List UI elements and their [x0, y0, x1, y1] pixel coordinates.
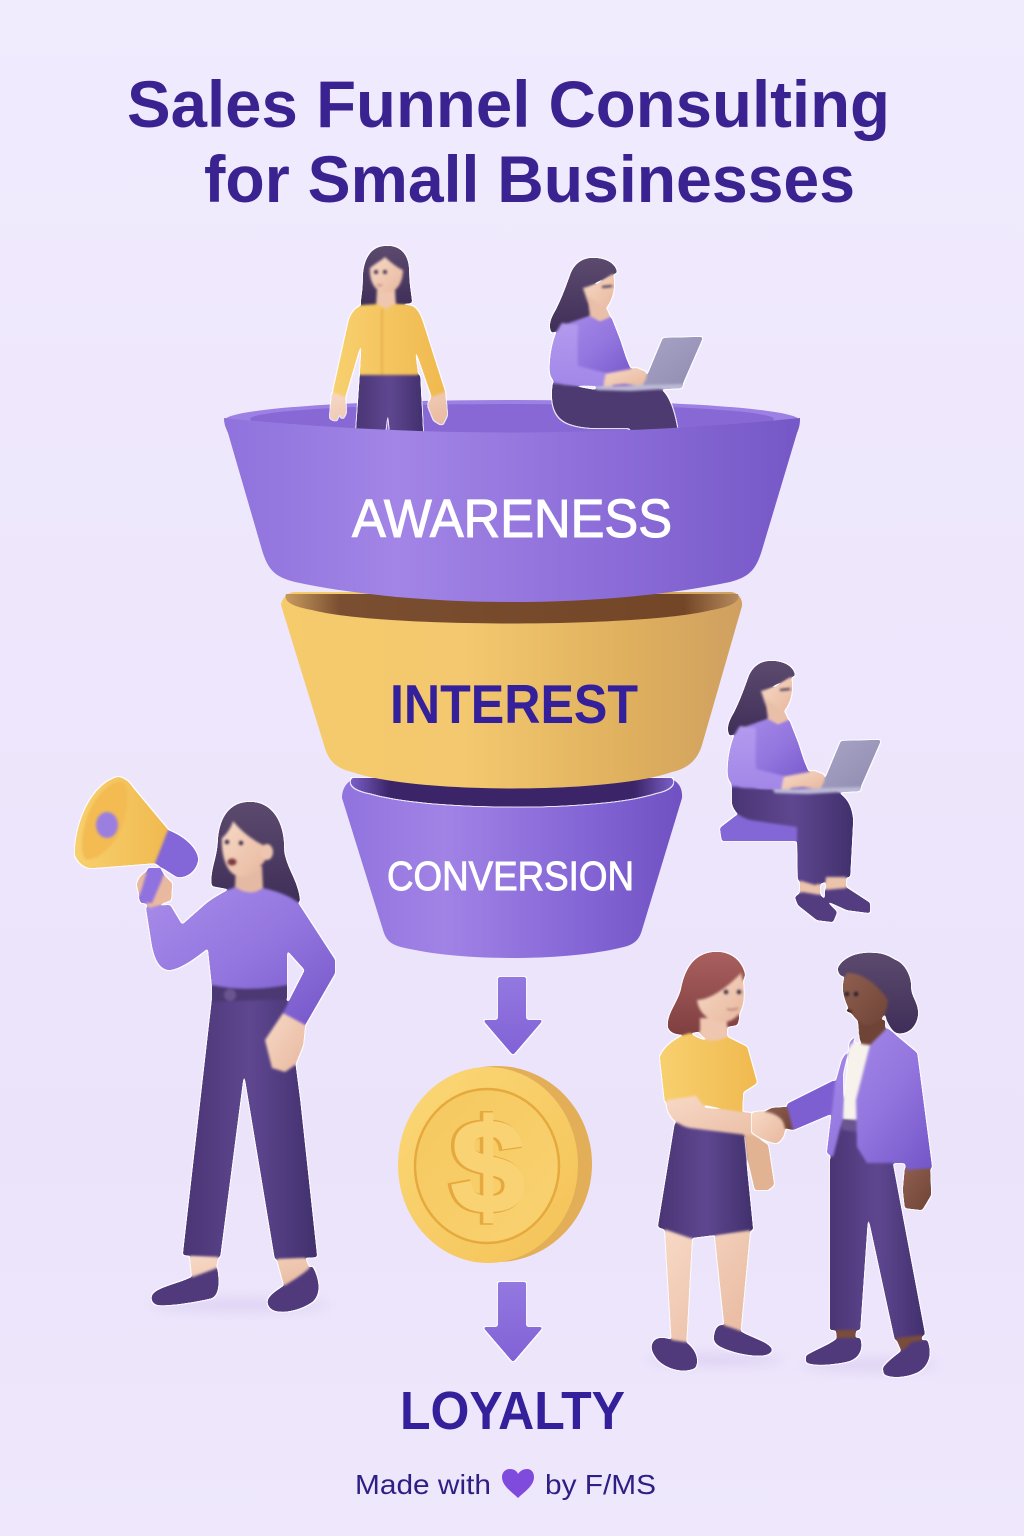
sweater	[146, 887, 335, 1025]
dollar sign shadow: $	[449, 1093, 523, 1240]
coin inner ring	[415, 1089, 559, 1243]
belt	[212, 985, 287, 1002]
ground shadow: blazer woman	[800, 1358, 940, 1372]
socks	[800, 875, 846, 898]
face details	[602, 286, 612, 287]
shoes	[806, 1338, 930, 1377]
coin face	[398, 1067, 578, 1263]
back arm	[745, 1130, 774, 1190]
arrow: coin to loyalty	[483, 1282, 543, 1362]
hair	[838, 953, 918, 1033]
fingers	[158, 875, 171, 900]
megaphone driver	[96, 812, 118, 838]
hair	[212, 802, 300, 902]
belt buckle	[224, 989, 236, 1001]
lowered hand	[265, 1013, 305, 1072]
face details	[374, 270, 387, 286]
funnel: interest	[281, 592, 742, 788]
legs	[732, 783, 853, 885]
funnel: conversion	[342, 778, 682, 958]
shoes	[152, 1266, 318, 1312]
funnel: awareness	[224, 418, 800, 602]
ground shadow: megaphone woman	[150, 1298, 330, 1312]
sweater	[553, 316, 631, 384]
face	[843, 973, 888, 1025]
jacket	[333, 304, 445, 397]
awareness label: AWARENESS	[352, 489, 672, 549]
person: woman with megaphone	[75, 777, 335, 1312]
face details	[225, 840, 243, 866]
person: seated on ledge with laptop	[720, 661, 881, 922]
neck	[376, 290, 396, 312]
shirt	[843, 1043, 870, 1120]
conversion shadow band	[351, 778, 673, 806]
face	[697, 973, 744, 1022]
bell opening	[82, 782, 127, 859]
loyalty label: LOYALTY	[400, 1381, 625, 1441]
title: for Small Businesses	[204, 142, 855, 216]
face	[583, 274, 614, 311]
person: red-haired woman shaking hands	[652, 952, 786, 1370]
belt	[842, 1120, 858, 1132]
footer credit: Made with	[355, 1469, 491, 1500]
shoes	[652, 1325, 772, 1370]
trousers	[356, 375, 423, 434]
trousers	[183, 1000, 317, 1259]
sleeve arm	[787, 1080, 835, 1130]
neck	[588, 296, 610, 321]
megaphone handle	[139, 868, 164, 903]
face	[222, 821, 268, 877]
front arm	[667, 1096, 786, 1143]
megaphone back	[155, 830, 198, 877]
funnel rim interior	[225, 400, 799, 440]
blazer	[827, 1028, 932, 1170]
hair back	[361, 246, 412, 305]
hands	[330, 392, 447, 425]
footer credit	[355, 1469, 656, 1500]
skirt	[658, 1123, 753, 1238]
arrow: funnel to coin	[483, 977, 543, 1055]
jacket seam	[381, 309, 383, 375]
clasping fingers	[752, 1112, 785, 1143]
ground shadow: red-haired woman	[645, 1353, 785, 1367]
far arm	[600, 320, 645, 390]
hand	[604, 368, 646, 386]
trousers	[830, 1120, 925, 1340]
face	[370, 257, 403, 293]
hair	[550, 258, 617, 333]
shoes	[795, 888, 870, 922]
face details	[724, 990, 741, 1010]
icon: heart	[502, 1469, 534, 1498]
title	[127, 67, 890, 216]
coin	[398, 1066, 592, 1263]
title: Sales Funnel Consulting	[127, 67, 890, 141]
free hand	[903, 1168, 931, 1210]
ankles	[836, 1330, 922, 1352]
dollar sign: $	[451, 1093, 525, 1240]
sleeve	[550, 323, 606, 386]
interest label: INTEREST	[390, 673, 638, 735]
face details	[845, 992, 858, 1012]
ear	[261, 844, 273, 860]
hair	[668, 952, 745, 1034]
neck	[858, 1020, 885, 1050]
upper body	[728, 661, 881, 794]
coin edge	[402, 1066, 592, 1262]
laptop	[643, 337, 703, 386]
tshirt	[660, 1033, 757, 1112]
legs	[665, 1228, 750, 1345]
person: woman in purple blazer shaking hands	[752, 953, 932, 1377]
conversion label: CONVERSION	[387, 853, 634, 899]
ledge	[720, 815, 797, 841]
interest shadow band	[286, 594, 738, 624]
person: yellow jacket standing in funnel	[330, 246, 447, 434]
neck	[700, 1018, 727, 1044]
ankles	[190, 1256, 312, 1288]
trousers	[552, 383, 678, 434]
person: seated with laptop on funnel	[550, 258, 703, 434]
clasped hand	[762, 1107, 793, 1130]
neck	[235, 866, 263, 896]
megaphone bell	[75, 777, 168, 868]
footer credit: by F/MS	[545, 1469, 656, 1500]
raised hand	[137, 872, 172, 908]
